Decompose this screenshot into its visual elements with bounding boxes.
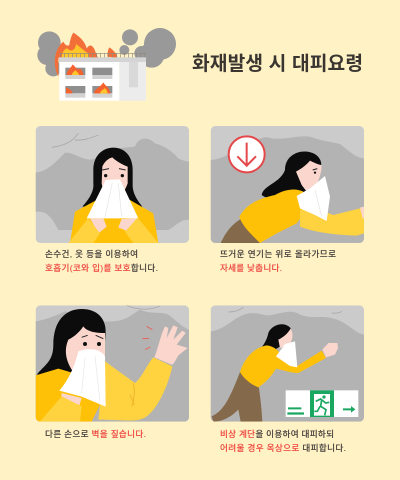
- caption 2: [220, 248, 336, 273]
- icon: burning building: [37, 28, 176, 101]
- icon: emergency exit sign: [286, 390, 358, 417]
- caption 2: 뜨거운 연기는 위로 올라가므로: [220, 248, 336, 259]
- panel: emergency stairs: [211, 305, 364, 422]
- panel: cover nose and mouth: [36, 126, 189, 243]
- caption 4: 어려울 경우 옥상으로 대피합니다.: [220, 442, 346, 453]
- caption 2: 자세를 낮춥니다.: [220, 262, 282, 273]
- caption 4: [220, 428, 346, 453]
- panel: touch wall: [36, 305, 189, 422]
- title: 화재발생 시 대피요령: [192, 53, 363, 75]
- caption 1: [45, 248, 158, 273]
- panel: lower posture: [211, 126, 364, 243]
- caption 1: 호흡기(코와 입)를 보호합니다.: [45, 262, 158, 273]
- caption 4: 비상 계단을 이용하여 대피하되: [220, 428, 334, 439]
- caption 3: 다른 손으로 벽을 짚습니다.: [45, 428, 146, 439]
- caption 1: 손수건, 옷 등을 이용하여: [45, 248, 138, 259]
- icon: down arrow sign: [229, 136, 265, 172]
